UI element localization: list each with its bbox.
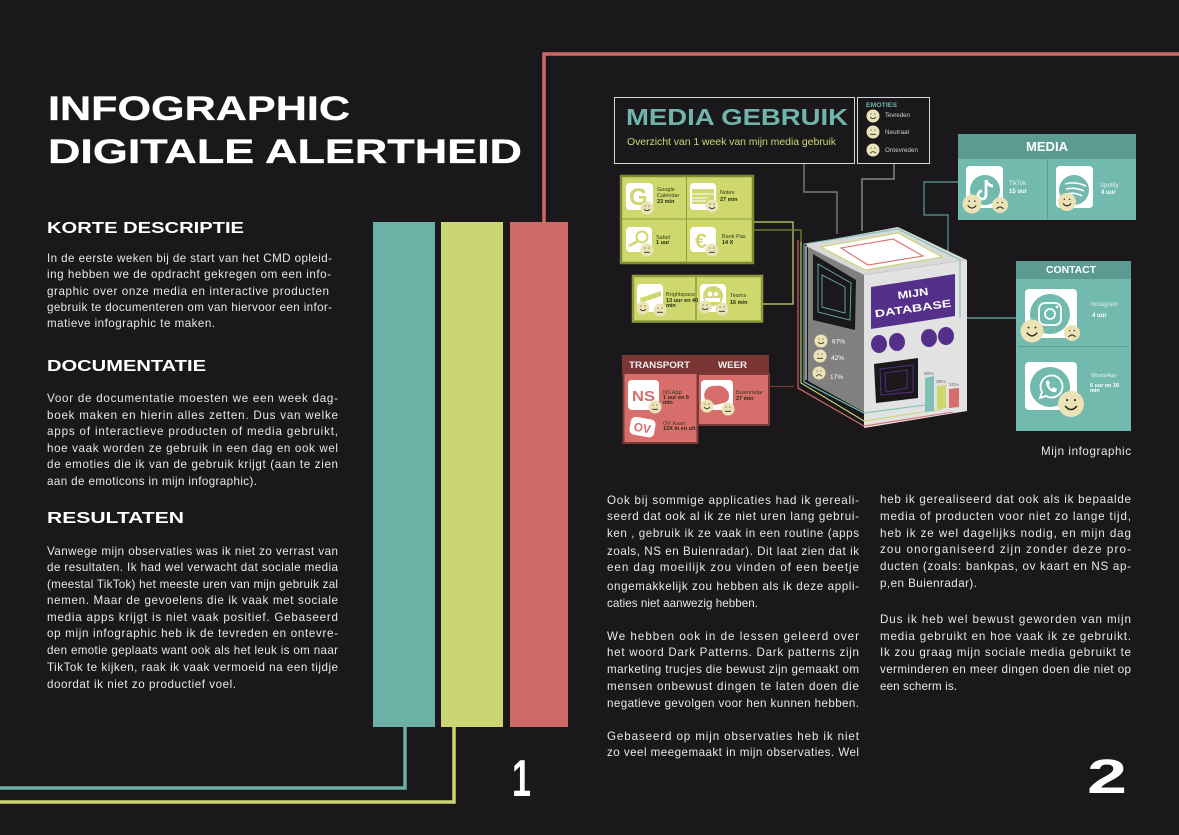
text: documentatie: boek maken en hierin alles zetten. Dus van welke	[47, 409, 338, 422]
bar chart	[924, 371, 959, 412]
cube right face	[864, 260, 967, 428]
text column: page 2 right: Dus ik heb wel bewust geworden van mijn	[880, 613, 1131, 626]
panel: media	[958, 134, 1136, 220]
panel: transport	[622, 355, 769, 443]
purple buttons	[871, 327, 954, 353]
header: transport and weer: TRANSPORT	[629, 360, 690, 371]
lime column	[441, 222, 503, 727]
cube left face	[808, 247, 864, 412]
cube top	[806, 227, 967, 275]
app labels: Spotify	[1100, 183, 1118, 189]
legend labels: Ontevreden	[885, 147, 919, 154]
text column: page 2 right: een scherm is.	[880, 680, 957, 693]
text: documentatie: apps of interactieve producten of media gebruikt,	[47, 425, 338, 438]
app labels: 15 uur	[1009, 189, 1028, 195]
text column: page 2 left	[607, 494, 860, 759]
app labels: 13 uur en 40	[666, 298, 698, 304]
bar chart: 30%	[936, 379, 946, 385]
text column: page 2 left: een dag moeilijk zou vinden of een beetje	[607, 561, 859, 574]
icon: notes	[690, 183, 718, 212]
app labels: 14 X	[722, 240, 734, 246]
text: documentatie	[47, 392, 338, 488]
app labels: min	[666, 303, 676, 309]
app labels: OV Kaart	[663, 421, 686, 427]
text column: page 2 left: ongemakkelijk zou hebben als ik deze appli-	[607, 580, 859, 593]
heading: resultaten: RESULTATEN	[47, 510, 184, 527]
text: korte descriptie: In de eerste weken bij de start van het CMD opleid-	[47, 252, 332, 265]
text column: page 2 right	[880, 493, 1131, 693]
title: INFOGRAPHIC	[48, 90, 350, 128]
app labels	[1090, 302, 1119, 394]
app labels: Bank Pas	[722, 234, 746, 240]
text column: page 2 right: ducten (zoals: bankpas, ov kaart en NS ap-	[880, 560, 1131, 573]
lime frame line	[0, 727, 454, 802]
text column: page 2 left: marketing trucjes die bewust zijn gemaakt om	[607, 663, 859, 676]
app labels: Notes	[720, 190, 735, 196]
icon: safari search	[626, 227, 654, 256]
text: korte descriptie: graphic over onze media en interactive producten	[47, 285, 329, 298]
text column: page 2 left: negatieve gevolgen voor hen kunnen hebben.	[607, 697, 859, 710]
text: resultaten	[47, 545, 339, 691]
banner: mijn database: MIJN	[897, 286, 929, 302]
subtitle: Overzicht van 1 week van mijn media gebruik	[627, 136, 837, 148]
text: resultaten: Vanwege mijn observaties was ik niet zo verrast van	[47, 545, 338, 558]
icon: brightspace	[636, 284, 666, 316]
app labels: Google	[657, 187, 675, 193]
text column: page 2 right: Ik zou graag mijn sociale media gebruikt te	[880, 646, 1131, 659]
red column	[510, 222, 568, 727]
text: korte descriptie: matieve infographic te maken.	[47, 317, 215, 330]
chart: mijn database cube	[798, 227, 967, 428]
app labels: Safari	[656, 235, 670, 241]
red frame line	[544, 54, 1179, 222]
teal column	[373, 222, 435, 727]
text: documentatie: aan de emoticons in mijn infographic).	[47, 475, 257, 488]
app labels: 27 min	[720, 197, 738, 203]
header: contact: CONTACT	[1046, 264, 1097, 276]
icon: spotify	[1056, 166, 1093, 211]
text column: page 2 right: heb ik ze wel dagelijks nodig, en mijn dag	[880, 527, 1131, 540]
text column: page 2 left: zoals, NS en Buienradar). Dit laat zien dat ik	[607, 545, 859, 558]
app labels: Teams	[730, 293, 746, 299]
text: resultaten: op mijn infographic heb ik de tevreden en ontevre-	[47, 627, 338, 640]
icon: google calendar: G	[629, 184, 648, 211]
text: resultaten: de resultaten. Ik had wel verwacht dat sociale media	[47, 561, 339, 574]
heading: korte descriptie: KORTE DESCRIPTIE	[47, 220, 244, 237]
text: documentatie: hoe vaak worden ze gebruik in een dag en ook wel	[47, 442, 338, 455]
app label	[736, 390, 763, 402]
app labels: min	[1090, 388, 1100, 394]
app labels: 1 uur	[656, 240, 670, 246]
left screen	[813, 254, 856, 330]
panel: brightspace and teams	[633, 276, 762, 322]
bar chart: 10%	[949, 382, 959, 388]
text column: page 2 right: p,en Buienradar).	[880, 577, 977, 590]
panel: emoties legend	[858, 98, 930, 164]
text column: page 2 left: Ook bij sommige applicaties had ik gereali-	[607, 494, 859, 507]
text column: page 2 right: verminderen en meer dingen doen die niet op	[880, 663, 1131, 676]
icon: bank pas: €	[695, 230, 707, 253]
text column: page 2 left: mensen onbewust dingen te laten doen die	[607, 680, 859, 693]
cube outlines	[798, 229, 960, 426]
heading: media gebruik: MEDIA GEBRUIK	[626, 104, 848, 130]
app labels: 4 uur	[1101, 190, 1116, 196]
text column: page 2 left: Gebaseerd op mijn observaties heb ik niet	[607, 730, 860, 743]
text: documentatie: Voor de documentatie moesten we een week dag-	[47, 392, 338, 405]
text: resultaten: TikTok te kijken, raak ik vaak vermoeid na een tijdje	[47, 661, 338, 674]
app labels: TikTok	[1009, 181, 1027, 187]
app label: Buienradar	[736, 390, 763, 396]
banner: mijn database	[871, 274, 955, 329]
emotion percentages: 42%	[831, 355, 844, 362]
app labels	[1009, 181, 1118, 196]
page number 1: 1	[512, 750, 531, 808]
emotion percentages: 67%	[832, 338, 845, 346]
text column: page 2 right: heb ik gerealiseerd dat ook als ik bepaalde	[880, 493, 1131, 506]
text: korte descriptie: ing hebben we de opdracht gekregen om een info-	[47, 268, 331, 281]
teal frame line	[0, 727, 405, 788]
legend labels	[885, 112, 919, 154]
banner: mijn database: DATABASE	[874, 298, 952, 320]
icon: ov kaart: OV	[633, 420, 652, 436]
page number 2: 2	[1087, 751, 1127, 804]
icon: teams	[698, 284, 728, 316]
front screen	[874, 358, 918, 403]
text: documentatie: de emoties die ik van de gebruik krijgt (aan te zien	[47, 458, 338, 471]
text: resultaten: doordat ik niet zo productief voel.	[47, 678, 236, 691]
app labels: NS App	[663, 390, 682, 396]
emotion percentages: 17%	[830, 374, 843, 381]
text: resultaten: media apps krijgt is niet vaak positief. Gebaseerd	[47, 611, 338, 624]
icon: ov kaart	[629, 416, 656, 438]
app labels: Instagram	[1091, 302, 1118, 308]
legend labels: Neutraal	[885, 129, 909, 136]
icon: ns app: NS	[632, 388, 655, 405]
panel: weer	[698, 374, 769, 425]
app labels: 23 min	[657, 199, 675, 205]
text column: page 2 left: ken , gebruik ik ze vaak in een routine (apps	[607, 527, 859, 540]
panel: lime apps	[621, 176, 753, 263]
app labels: 13X in en uit	[663, 426, 696, 432]
heading: documentatie: DOCUMENTATIE	[47, 358, 206, 375]
header: media: MEDIA	[1026, 139, 1069, 154]
icon: ns app	[628, 380, 662, 414]
app labels: Brightspace	[666, 292, 695, 298]
icon: instagram	[1020, 289, 1080, 342]
app labels	[663, 390, 696, 432]
title	[48, 90, 522, 171]
panel: contact	[1016, 261, 1131, 431]
emotion percentages	[812, 334, 845, 381]
text column: page 2 right: media gebruikt en hoe vaak ik ze gebruikt.	[880, 630, 1131, 643]
app labels: min	[663, 400, 673, 406]
legend labels: Tevreden	[885, 112, 911, 119]
title: DIGITALE ALERTHEID	[48, 133, 522, 171]
icon: buienradar	[700, 380, 734, 416]
app labels: WhatsApp	[1091, 373, 1116, 379]
text: korte descriptie: gebruik te documenteren om van hiervoor een infor-	[47, 301, 332, 314]
app labels: 1 uur en 6	[663, 395, 689, 401]
text column: page 2 left: We hebben ook in de lessen geleerd over	[607, 630, 859, 643]
header: transport and weer: WEER	[718, 360, 747, 371]
text column: page 2 left: zo veel meegemaakt in mijn observaties. Wel	[607, 746, 859, 759]
app label: 27 min	[736, 396, 754, 402]
text: korte descriptie	[47, 252, 332, 330]
text column: page 2 left: caties niet aanwezig hebben.	[607, 597, 758, 610]
app labels: Calendar	[657, 193, 679, 199]
app labels: 16 min	[730, 300, 748, 306]
icon: whatsapp	[1025, 362, 1084, 417]
connector lines	[753, 163, 1016, 386]
text column: page 2 right: zou onorganiseerd zijn zonder deze pro-	[880, 543, 1131, 556]
app labels: 6 uur en 30	[1090, 383, 1119, 389]
app labels	[656, 187, 746, 246]
panel: media gebruik title box	[614, 98, 854, 164]
text column: page 2 right: media of producten voor niet zo lange tijd,	[880, 510, 1131, 523]
header: transport and weer	[622, 355, 769, 374]
text column: page 2 left: het woord Dark Patterns. Dark patterns zijn	[607, 646, 859, 659]
text: resultaten: (meestal TikTok) het meeste uren van mijn gebruik zal	[47, 578, 338, 591]
app labels	[666, 292, 748, 309]
text column: page 2 left: seerd dat ook al ik ze niet uren lang gebrui-	[607, 510, 859, 523]
text: resultaten: den emotie geplaats want ook als het leuk is om naar	[47, 644, 338, 657]
app labels: 4 uur	[1092, 313, 1107, 319]
caption: Mijn infographic	[1041, 445, 1131, 458]
icon: tiktok	[962, 166, 1008, 214]
legend title: EMOTIES	[866, 102, 898, 109]
text: resultaten: nemen. Maar de gevoelens die ik vaak met sociale	[47, 594, 338, 607]
bar chart: 60%	[924, 371, 934, 377]
